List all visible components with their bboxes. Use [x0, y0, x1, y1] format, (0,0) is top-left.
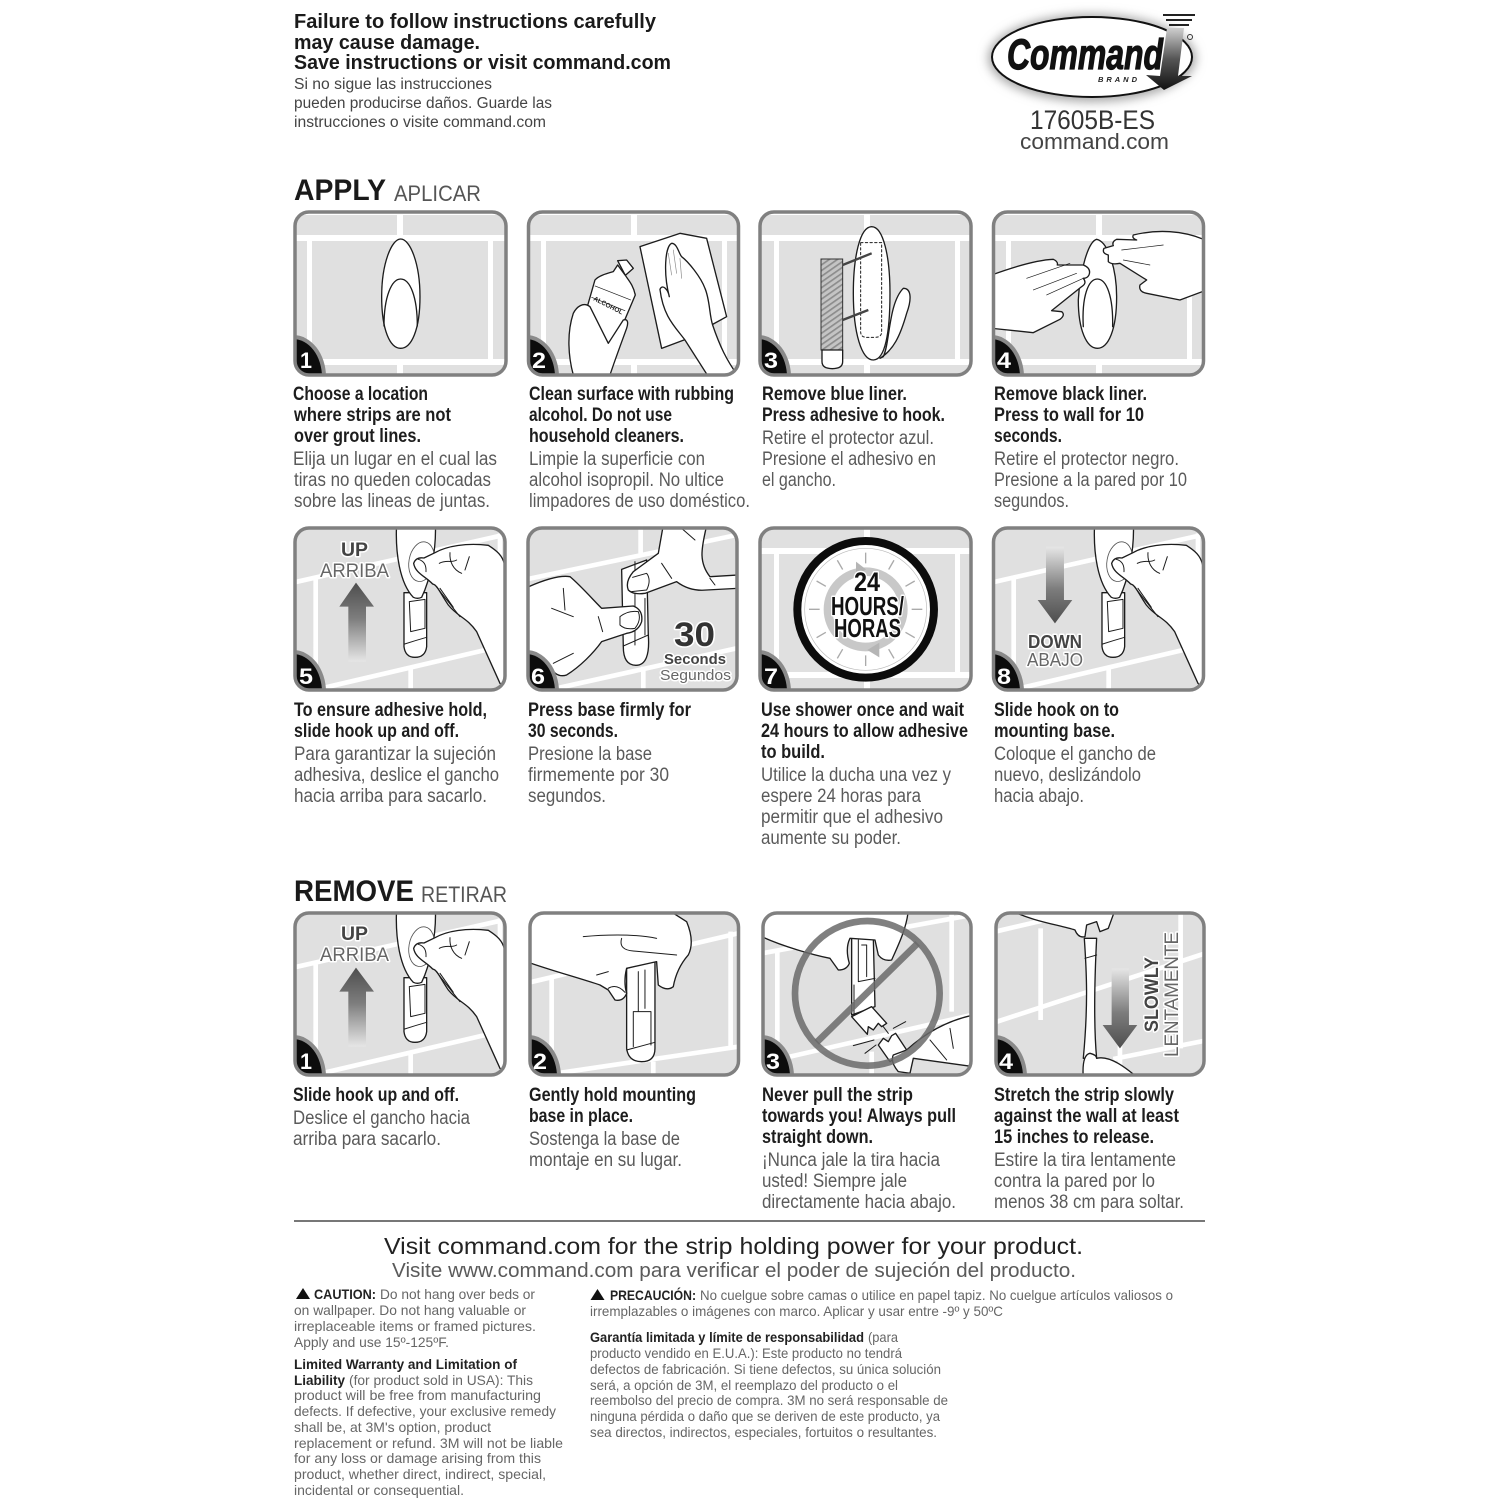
caption: apply step 1: Elija un lugar en el cual las — [293, 449, 497, 470]
heading: remove — [294, 875, 507, 908]
warranty block: English: (for product sold in USA): This — [349, 1372, 533, 1388]
caption: apply step 8: nuevo, deslizándolo — [994, 765, 1141, 786]
caption: apply step 7: aumente su poder. — [761, 828, 901, 849]
panel: apply step 5 — [293, 526, 507, 692]
panel: apply step 1 — [293, 210, 508, 377]
caption: remove step 3: ¡Nunca jale la tira hacia — [762, 1150, 940, 1171]
warning text: Spanish: instrucciones o visite command.com — [294, 114, 546, 131]
warranty block: English: incidental or consequential. — [294, 1482, 464, 1498]
heading: apply — [294, 174, 481, 207]
step badge — [530, 335, 559, 374]
warranty block: Spanish: (para — [868, 1329, 898, 1345]
caption: apply step 5: adhesiva, deslice el gancho — [294, 765, 499, 786]
panel: remove step 1 — [260, 905, 510, 1119]
caption: apply step 8: mounting base. — [994, 721, 1115, 742]
illustration: cleaning with alcohol — [569, 233, 737, 375]
warranty block: Spanish: será, a opción de 3M, el reemplazo del producto o el — [590, 1377, 898, 1393]
warranty block: English: Limited Warranty and Limitation of — [294, 1356, 517, 1372]
caption: apply step 2 — [529, 384, 750, 512]
caption: apply step 7: 24 hours to allow adhesive — [761, 721, 968, 742]
label: lentamente: LENTAMENTE — [1162, 932, 1183, 1057]
label: arriba: ARRIBA — [320, 945, 389, 966]
step badge — [762, 335, 791, 374]
caption: apply step 5 — [294, 700, 499, 807]
caption: apply step 6 — [528, 700, 692, 807]
step number: 5 — [299, 664, 313, 689]
caption: apply step 5: To ensure adhesive hold, — [294, 700, 487, 721]
caption: apply step 7: Use shower once and wait — [761, 700, 965, 721]
warning text: Spanish: Si no sigue las instrucciones — [294, 76, 492, 93]
illustration: pressing hook to wall — [992, 231, 1207, 348]
warranty block: Spanish: defectos de fabricación. Si tiene defectos, su única solución — [590, 1361, 941, 1377]
caption: remove step 2: Gently hold mounting — [529, 1085, 696, 1106]
illustration: adhesive strip to hook — [821, 227, 910, 369]
caption: apply step 8 — [994, 700, 1156, 807]
warranty block: Spanish: ninguna pérdida o daño que se deriven de este producto, ya — [590, 1408, 940, 1424]
caption: remove step 3: Never pull the strip — [762, 1085, 913, 1106]
step badge — [995, 335, 1024, 374]
caption: apply step 1: over grout lines. — [294, 426, 421, 447]
step badge — [958, 650, 1024, 734]
caption: apply step 8: hacia abajo. — [994, 786, 1084, 807]
caption: apply step 2: Clean surface with rubbing — [529, 384, 734, 405]
caption: remove step 1: arriba para sacarlo. — [293, 1129, 441, 1150]
warranty block: English: product will be free from manufacturing — [294, 1387, 541, 1403]
warranty block: Spanish: reembolso del precio de compra. 3M no será responsable de — [590, 1392, 948, 1408]
warranty block: English: for any loss or damage arising from this — [294, 1450, 541, 1466]
caption: apply step 3: el gancho. — [762, 470, 836, 491]
illustration: press base firmly — [530, 530, 736, 688]
website: command.com — [1020, 129, 1169, 154]
label: slowly: SLOWLY — [1142, 957, 1163, 1032]
caption: remove step 3: directamente hacia abajo. — [762, 1192, 956, 1213]
bottle label: ALCOHOL — [592, 296, 624, 316]
label: down: DOWN — [1028, 632, 1082, 652]
caption: apply step 7: permitir que el adhesivo — [761, 807, 943, 828]
illustration: stretch the strip — [993, 905, 1213, 1085]
step number: 3 — [766, 1049, 780, 1074]
warranty block: English: replacement or refund. 3M will not be liable — [294, 1435, 563, 1451]
panel: apply step 3 — [758, 210, 973, 377]
caption: apply step 7 — [761, 700, 968, 849]
label: seconds: Seconds — [664, 651, 726, 668]
step number: 2 — [533, 1049, 547, 1074]
warranty block: English: shall be, at 3M's option, product — [294, 1419, 491, 1435]
illustration: slide hook down — [988, 520, 1208, 700]
heading: apply: APPLY — [294, 174, 386, 207]
caption: remove step 4: menos 38 cm para soltar. — [994, 1192, 1184, 1213]
illustration: do not pull toward you — [760, 905, 980, 1085]
caution block: Spanish: No cuelgue sobre camas o utilice en papel tapiz. No cuelgue artículos valiosos o — [700, 1287, 1173, 1303]
caption: apply step 7: to build. — [761, 742, 825, 763]
illustration: hook on wall — [382, 239, 420, 348]
warranty block: Spanish: sea directos, indirectos, especiales, fortuitos o resultantes. — [590, 1424, 937, 1440]
caption: apply step 6: Press base firmly for — [528, 700, 692, 721]
step badge — [728, 1035, 794, 1119]
caption: apply step 4: segundos. — [994, 491, 1069, 512]
label: abajo: ABAJO — [1027, 650, 1083, 670]
warranty block: English: defects. If defective, your exclusive remedy — [294, 1403, 556, 1419]
step number: 1 — [300, 348, 312, 373]
caption: remove step 2: Sostenga la base de — [529, 1129, 680, 1150]
step number: 4 — [999, 1049, 1014, 1074]
caption: apply step 7: Utilice la ducha una vez y — [761, 765, 951, 786]
caption: apply step 1: sobre las lineas de juntas. — [294, 491, 490, 512]
product code: 17605B-ES — [1030, 105, 1155, 135]
warranty block: English: product, whether direct, indirect, special, — [294, 1466, 546, 1482]
caption: apply step 6: firmemente por 30 — [528, 765, 669, 786]
panel: apply step 2 — [526, 210, 740, 377]
caption: apply step 2: alcohol isopropil. No ultice — [529, 470, 724, 491]
text: visit command.com: Visit command.com for the strip holding power for your product. — [384, 1233, 1083, 1259]
caution block: English: CAUTION: — [314, 1286, 376, 1302]
caption: remove step 2 — [529, 1085, 696, 1171]
panel: apply step 6 — [526, 526, 739, 692]
caption: apply step 4: Press to wall for 10 — [994, 405, 1144, 426]
caption: remove step 4: against the wall at least — [994, 1106, 1180, 1127]
caption: remove step 3: towards you! Always pull — [762, 1106, 956, 1127]
caption: apply step 6: Presione la base — [528, 744, 652, 765]
step badge — [296, 650, 326, 688]
warning text: Spanish — [294, 76, 552, 131]
warning text: English — [294, 11, 671, 74]
warning text: English: Failure to follow instructions carefully — [294, 11, 657, 33]
caption: apply step 5: hacia arriba para sacarlo. — [294, 786, 487, 807]
caption: remove step 4: Estire la tira lentamente — [994, 1150, 1176, 1171]
caption: apply step 3: Retire el protector azul. — [762, 428, 934, 449]
caption: remove step 1: Deslice el gancho hacia — [293, 1108, 470, 1129]
step number: 1 — [300, 1049, 312, 1074]
caption: apply step 1: tiras no queden colocadas — [294, 470, 491, 491]
caption: remove step 4: 15 inches to release. — [994, 1127, 1154, 1148]
caption: remove step 4: Stretch the strip slowly — [994, 1085, 1174, 1106]
panel: remove step 4 — [961, 905, 1213, 1119]
caption: remove step 3 — [762, 1085, 956, 1213]
label: hours: HOURS/ — [831, 591, 904, 621]
caption: remove step 4 — [994, 1085, 1184, 1213]
caption: apply step 5: slide hook up and off. — [294, 721, 459, 742]
caption: apply step 2: limpadores de uso doméstico. — [529, 491, 750, 512]
step number: 2 — [532, 348, 546, 373]
caption: apply step 1: Choose a location — [293, 384, 428, 405]
warranty block: English: Liability — [294, 1372, 345, 1388]
step number: 8 — [997, 664, 1011, 689]
step badge — [495, 1035, 561, 1119]
icon: warning triangle — [590, 1289, 604, 1300]
text: visite command.com: Visite www.command.com para verificar el poder de sujeción del producto. — [392, 1260, 1076, 1282]
caption: apply step 6: 30 seconds. — [528, 721, 618, 742]
arrow: down — [1038, 547, 1072, 623]
caution block: Spanish: irremplazables o imágenes con marco. Aplicar y usar entre -9º y 50ºC — [590, 1303, 1003, 1319]
step number: 6 — [531, 664, 545, 689]
caption: remove step 2: montaje en su lugar. — [529, 1150, 682, 1171]
caption: apply step 3 — [762, 384, 945, 491]
caption: remove step 3: straight down. — [762, 1127, 873, 1148]
caption: apply step 1: where strips are not — [293, 405, 452, 426]
caution block: Spanish: PRECAUCIÓN: — [610, 1286, 696, 1303]
heading: remove: RETIRAR — [421, 882, 507, 907]
step badge — [762, 650, 791, 688]
caption: apply step 5: Para garantizar la sujeción — [294, 744, 496, 765]
step badge — [260, 1035, 326, 1119]
step number: 7 — [764, 664, 778, 689]
step badge — [530, 650, 559, 688]
caution block: Spanish — [590, 1286, 1173, 1319]
caption: apply step 4 — [994, 384, 1187, 512]
illustration: 24 hour clock — [797, 541, 934, 678]
step badge — [961, 1035, 1027, 1119]
caption: remove step 3: usted! Siempre jale — [762, 1171, 907, 1192]
caption: apply step 6: segundos. — [528, 786, 606, 807]
warranty block: English — [294, 1356, 563, 1498]
caption: apply step 2: alcohol. Do not use — [529, 405, 672, 426]
caption: remove step 1: Slide hook up and off. — [293, 1085, 459, 1106]
label: horas: HORAS — [834, 613, 901, 643]
caption: apply step 3: Remove blue liner. — [762, 384, 907, 405]
timer: 30 seconds: 30 — [674, 616, 715, 654]
illustration: slide hook up and off — [290, 905, 510, 1085]
illustration: hold mounting base — [527, 905, 747, 1085]
panel: apply step 4 — [992, 210, 1206, 377]
warning text: English: may cause damage. — [294, 32, 480, 54]
caption: apply step 1 — [293, 384, 497, 512]
warranty block: Spanish: Garantía limitada y límite de responsabilidad — [590, 1329, 864, 1345]
caption: apply step 2: Limpie la superficie con — [529, 449, 705, 470]
panel: remove step 3 — [728, 905, 980, 1119]
caption: apply step 7: espere 24 horas para — [761, 786, 921, 807]
label: up: UP — [341, 924, 368, 945]
label: up: UP — [341, 540, 368, 561]
step number: 3 — [764, 348, 778, 373]
step number: 4 — [997, 348, 1012, 373]
caption: apply step 4: seconds. — [994, 426, 1062, 447]
step badge — [296, 335, 326, 374]
warranty block: Spanish: producto vendido en E.U.A.): Este producto no tendrá — [590, 1345, 902, 1361]
warning text: English: Save instructions or visit command.com — [294, 52, 671, 74]
logo: Command brand: Command — [1007, 31, 1164, 79]
logo: Command brand — [988, 14, 1196, 102]
caution block: English: irreplaceable items or framed pictures. — [294, 1318, 536, 1334]
caption: apply step 2: household cleaners. — [529, 426, 684, 447]
caption: apply step 4: Retire el protector negro. — [994, 449, 1179, 470]
caution block: English — [294, 1286, 536, 1350]
caption: apply step 4: Remove black liner. — [994, 384, 1147, 405]
warranty block: Spanish — [590, 1329, 948, 1440]
warning text: Spanish: pueden producirse daños. Guarde las — [294, 95, 552, 112]
heading: apply: APLICAR — [394, 181, 481, 206]
panel: remove step 2 — [495, 905, 747, 1119]
logo: Command brand: BRAND — [1098, 75, 1138, 84]
icon: warning triangle — [296, 1288, 310, 1299]
caption: apply step 8: Coloque el gancho de — [994, 744, 1156, 765]
caption: remove step 1 — [293, 1085, 470, 1150]
panel: apply step 7 — [758, 526, 973, 692]
label: segundos: Segundos — [660, 667, 731, 684]
caution block: English: on wallpaper. Do not hang valuable or — [294, 1302, 526, 1318]
label: arriba: ARRIBA — [320, 561, 389, 582]
caution block: English: Apply and use 15º-125ºF. — [294, 1334, 449, 1350]
caption: apply step 8: Slide hook on to — [994, 700, 1119, 721]
caption: apply step 3: Presione el adhesivo en — [762, 449, 936, 470]
caption: remove step 2: base in place. — [529, 1106, 633, 1127]
heading: remove: REMOVE — [294, 875, 414, 908]
caption: apply step 4: Presione a la pared por 10 — [994, 470, 1187, 491]
panel: apply step 8 — [992, 526, 1206, 692]
caption: remove step 4: contra la pared por lo — [994, 1171, 1155, 1192]
caution block: English: Do not hang over beds or — [380, 1286, 535, 1302]
label: 24: 24 — [854, 567, 880, 597]
illustration: slide hook up — [296, 530, 504, 688]
caption: apply step 3: Press adhesive to hook. — [762, 405, 945, 426]
